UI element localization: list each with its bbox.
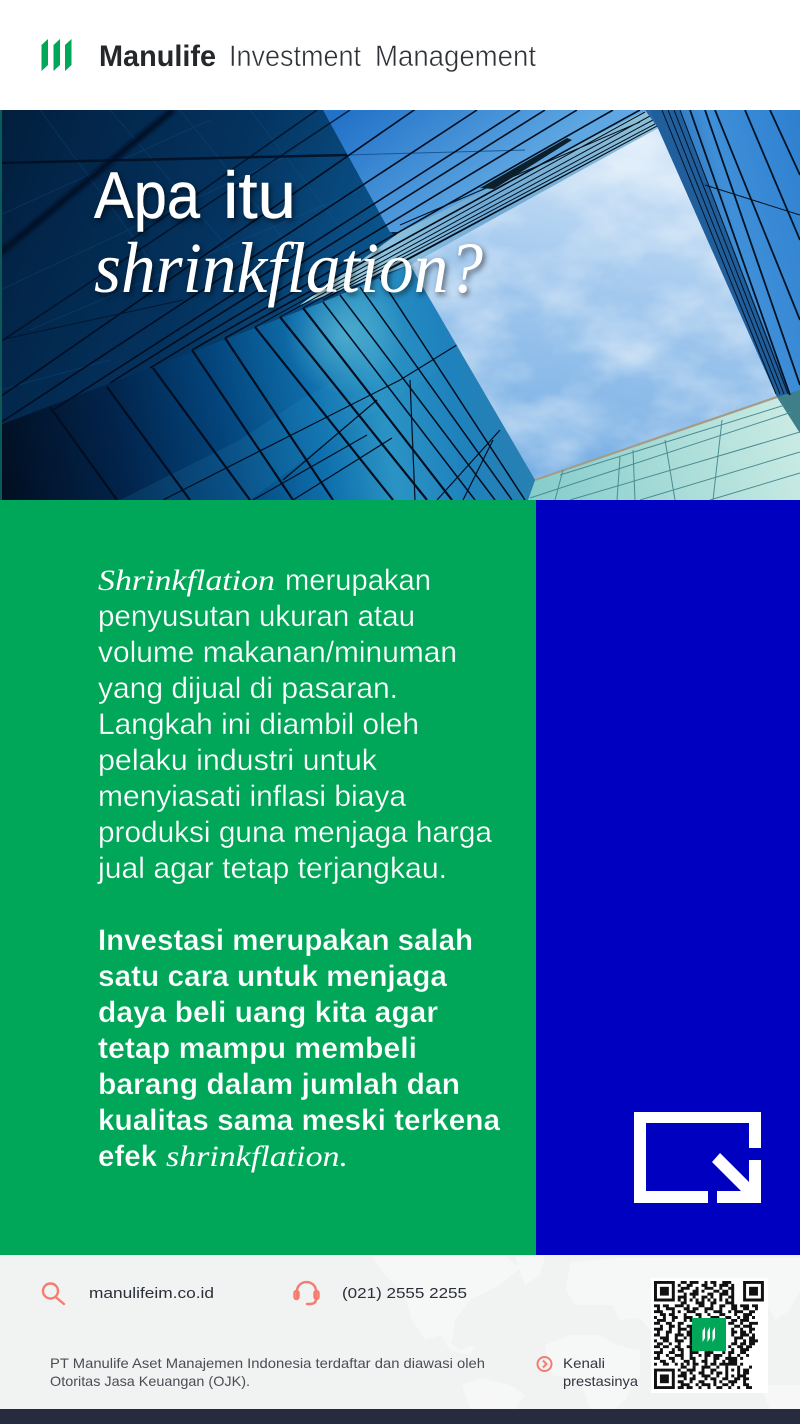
title: shrinkflation? [94, 228, 483, 308]
title [94, 158, 483, 308]
phone number: (021) 2555 2255 [342, 1285, 467, 1302]
icon: chevron circle [538, 1357, 552, 1371]
footer bar [0, 1409, 800, 1424]
icon: Manulife three green bars [42, 39, 72, 71]
website: manulifeim.co.id [89, 1285, 214, 1302]
wordmark: Management [375, 40, 537, 73]
text block: investment message: barang dalam jumlah dan [98, 1068, 460, 1101]
text block: shrinkflation definition [97, 564, 492, 885]
text block: shrinkflation definition: merupakan [285, 564, 431, 597]
sky with clouds [405, 120, 785, 485]
text block: investment message: Investasi merupakan salah [98, 924, 473, 957]
text block: shrinkflation definition: Langkah ini diambil oleh [98, 708, 419, 741]
text block: investment message: tetap mampu membeli [98, 1032, 417, 1065]
wordmark: Investment [229, 40, 362, 73]
icon: search [43, 1284, 64, 1304]
world map background [372, 1256, 800, 1409]
text block: shrinkflation definition: yang dijual di pasaran. [98, 672, 398, 705]
text block: investment message: satu cara untuk menjaga [98, 960, 447, 993]
text block: shrinkflation definition: produksi guna menjaga harga [98, 816, 492, 849]
regulatory notice: Otoritas Jasa Keuangan (OJK). [50, 1373, 250, 1389]
text block: shrinkflation definition: pelaku industri untuk [98, 744, 378, 777]
icon: frame with diagonal arrow [634, 1112, 761, 1203]
facade lines [662, 110, 800, 395]
link text: Kenali prestasinya: Kenali [563, 1355, 605, 1371]
link text: Kenali prestasinya: prestasinya [563, 1373, 638, 1389]
regulatory notice: PT Manulife Aset Manajemen Indonesia terdaftar dan diawasi oleh [50, 1355, 485, 1371]
panel: blue side panel [536, 500, 800, 1255]
icon: QR centre logo [692, 1318, 726, 1351]
text block: shrinkflation definition: Shrinkflation [98, 564, 275, 597]
panel: green text panel [0, 500, 536, 1255]
text block: investment message [98, 924, 500, 1173]
subtle dark-zone grid [0, 110, 360, 390]
panel: footer [0, 1255, 800, 1409]
text block: investment message: shrinkflation. [166, 1140, 348, 1173]
text block: investment message: efek [98, 1140, 157, 1173]
link text: Kenali prestasinya [563, 1355, 638, 1389]
QR code [651, 1278, 768, 1393]
glass bands on lower facade [120, 417, 284, 500]
text block: shrinkflation definition: menyiasati inflasi biaya [98, 780, 406, 813]
text block: investment message: daya beli uang kita agar [98, 996, 438, 1029]
wordmark [99, 40, 537, 73]
wordmark: Manulife [99, 40, 216, 73]
fan lines over facade [0, 108, 657, 500]
text block: investment message: kualitas sama meski terkena [98, 1104, 500, 1137]
title: itu [223, 158, 296, 232]
text block: shrinkflation definition: penyusutan ukuran atau [98, 600, 415, 633]
regulatory notice [50, 1355, 485, 1389]
header logo [42, 39, 537, 73]
hero photo: glass building and sky [0, 108, 800, 500]
text block: shrinkflation definition: volume makanan/minuman [98, 636, 457, 669]
title: Apa [94, 158, 200, 232]
icon: headset [294, 1282, 318, 1304]
text block: shrinkflation definition: jual agar tetap terjangkau. [97, 852, 447, 885]
